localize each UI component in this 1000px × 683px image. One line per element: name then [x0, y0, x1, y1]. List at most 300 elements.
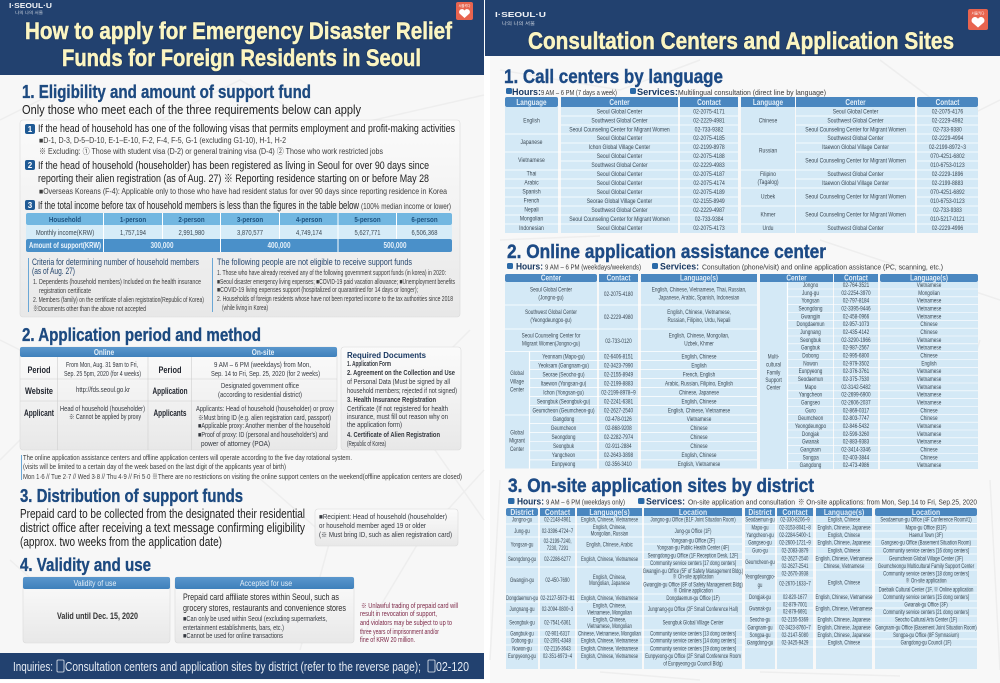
text: distribution instructions [20, 507, 306, 549]
panel: left page [0, 0, 484, 679]
rows: Seodaemun to Yeongdeungpo: Community service centers [18 dong centers] [883, 571, 969, 578]
table: household income and support amount: 5,627,771 [355, 229, 381, 237]
rows: district centers: Chinese [920, 416, 938, 422]
rows: Global Migrant Center: 02-868-9208 [605, 425, 632, 432]
rows: Seodaemun to Yeongdeungpo: Yangcheon-gu [746, 532, 774, 539]
rows: district centers: Chinese [920, 408, 938, 415]
rows: Jongno to Gwangjin: Mongolian, Russian [591, 531, 628, 538]
rows: district centers: Vietnamese [917, 392, 941, 399]
table: household income and support amount: 6,506,368 [412, 229, 438, 237]
rows: Dongdaemun to Eunpyeong: Jungnang-gu Office (2F Small Conference Hall) [648, 606, 738, 613]
rows: Dongdaemun to Eunpyeong: 02-901-6317 [545, 631, 570, 638]
rows: Global Village Center: Arabic, Russian, Filipino, English [665, 381, 733, 388]
rows: Seodaemun to Yeongdeungpo: English, Chinese [828, 532, 860, 539]
rows: main global centers: English, Chinese, Vietnamese, Thai, Russian, [652, 287, 747, 294]
column group: right languages: 02-733-9383 [933, 208, 962, 214]
rows: district centers: Vietnamese [917, 337, 941, 344]
rows: Dongdaemun to Eunpyeong: Chinese, Vietnamese, Mongolian [578, 631, 641, 638]
rows: district centers: 02-957-1073 [843, 322, 869, 328]
rows: Global Village Center: Village [510, 379, 524, 386]
rows: district centers: Chinese [920, 329, 938, 336]
rows: Seodaemun to Yeongdeungpo: Daebaik Cultural Center (1F, ※ Online application [879, 585, 973, 594]
rows: Global Village Center: Yeonnam (Mapo-gu) [542, 354, 585, 361]
rows: district centers: 02-3414-3346 [841, 447, 871, 454]
rows: Dongjak to Gangdong: English, Chinese, Vietnamese [815, 594, 873, 601]
column group: right languages: Southwest Global Center [827, 118, 884, 125]
rows: Global Migrant Center: Gangdong [553, 416, 574, 423]
label: multicultural family support center: Center [767, 385, 781, 392]
rows: district centers: Seodaemun [798, 376, 823, 383]
callout: recipient [315, 509, 458, 546]
rows: Dongdaemun to Eunpyeong [506, 595, 741, 668]
panel: right page [485, 0, 1000, 669]
column group: left languages: Southwest Global Center [591, 118, 648, 125]
panel: validity of use: Valid until Dec. 15, 2020 [57, 611, 138, 621]
heading: call centers: 1. Call centers by language [504, 66, 723, 88]
rows: district centers: Songpa [803, 455, 819, 462]
column group: right languages: Chinese [759, 118, 777, 125]
note: five day rotational system [21, 453, 462, 481]
rows: district centers: Eunpyeong [799, 369, 822, 375]
panel: accepted for use: ■Cannot be used for online transactions [183, 632, 283, 640]
note: ineligible people: 2. Households of foreign residents whose have not been reported income to the tax authorities since 2018 [217, 294, 453, 303]
table: household income and support amount: 300,000 [150, 241, 174, 250]
note: ineligible people: 1. Those who have already received any of the following government support funds (in korea) in 2020: [217, 268, 446, 277]
panel: accepted for use: Accepted for use [240, 578, 292, 588]
column group: left languages: Seoul Global Center [597, 226, 642, 232]
header banner: right [485, 0, 1000, 56]
rows: Seodaemun to Yeongdeungpo: 02-2284-5400~1 [779, 532, 811, 539]
rows: Seodaemun to Yeongdeungpo: Mapo-gu [752, 525, 768, 532]
rows: district centers: Gangbuk [801, 345, 820, 352]
logo: I Seoul U right: 나의 나의 서울 [502, 20, 535, 27]
column group: right languages: 02-2229-1896 [932, 172, 963, 178]
rows: Seodaemun to Yeongdeungpo: Guro-gu [752, 548, 768, 555]
column group: right languages: 010-6753-0123 [930, 163, 965, 169]
rows: district centers: 02-3290-1966 [841, 337, 871, 344]
row: website: (according to residential district) [218, 391, 302, 399]
rows: Jongno to Gwangjin: Jongno-gu [512, 517, 532, 524]
panel: required documents: 4. Certificate of Alien Registration [347, 431, 440, 439]
rows: district centers: 02-764-3521 [843, 282, 869, 289]
rows: Global Village Center: Chinese, Japanese [679, 390, 719, 397]
column group: right languages: 02-2075-4176 [932, 109, 963, 116]
rows: Dongdaemun to Eunpyeong: English, Chinese, [593, 617, 627, 624]
rows: main global centers: 02-2229-4980 [604, 314, 633, 321]
row: applicant [24, 405, 334, 448]
logo: I Seoul U: I·SEOUL·U [9, 3, 52, 10]
panel: required documents: 2. Agreement on the Collection and Use [347, 369, 455, 377]
rows: district centers: 02-797-8184 [843, 298, 869, 305]
rows: district centers: Vietnamese [917, 431, 941, 438]
table: household income and support amount: 400,000 [267, 241, 291, 250]
table: call centers by language: Contact [936, 98, 960, 107]
row: applicant: power of attorney (POA) [201, 440, 270, 448]
column group: left languages: Seoul Global Center [597, 181, 642, 187]
rows: district centers: Gangnam [800, 447, 821, 454]
requirement 3: income: (100% median income or lower) [361, 202, 451, 211]
rows: Global Village Center: English, Chinese [681, 399, 717, 406]
column group: left languages: 02-733-9384 [695, 217, 724, 223]
column group: left languages: Mongolian [520, 216, 543, 223]
rows: Dongdaemun to Eunpyeong: English, Chinese, Vietnamese [581, 595, 638, 602]
rows: Global Village Center: Ichon (Yongsan-gu) [543, 390, 584, 397]
note: household member criteria: 2. Members (family) on the certificate of alien registration(Republic of Korea) [33, 295, 204, 304]
rows: main global centers: 02-2075-4180 [604, 291, 633, 298]
column group: left languages: Indonesian [519, 226, 544, 232]
row: applicant: ※ Cannot be applied by proxy [69, 413, 141, 421]
table: call centers by language [505, 97, 978, 233]
column group: right languages: Seoul Counseling Center for Migrant Women [805, 194, 906, 201]
rows: Dongjak to Gangdong: 02-879-6691 [783, 609, 807, 616]
column group: left languages: Seoul Counseling Center for Migrant Women [569, 127, 670, 134]
rows: Dongdaemun to Eunpyeong: Community service centers [14 dong centers] [650, 638, 736, 645]
rows: Global Migrant Center: Seongdong [552, 434, 575, 441]
row: website: http://fds.seoul.go.kr [76, 386, 131, 394]
rows: Global Migrant Center: Chinese [690, 425, 708, 432]
rows: Seodaemun to Yeongdeungpo: Mapo-gu Office (B1F) [905, 525, 947, 532]
column group: right languages: 02-2199-8883 [932, 181, 963, 187]
column group: left languages: Seoul Global Center [597, 136, 642, 142]
panel: accepted for use: ■Can only be used within Seoul (excluding supermarkets, [183, 615, 327, 623]
rows: district centers: Vietnamese [917, 298, 941, 305]
column group: left languages: Spanish [522, 189, 541, 196]
rows: Dongdaemun to Eunpyeong: Dongdaemun-gu Office (1F) [666, 595, 720, 602]
requirement 1: visa: If the head of household has one of the following visas that permits employment and profit-making activities [38, 123, 455, 135]
rows: main global centers [522, 287, 747, 348]
table: online and on-site application: Online [94, 347, 114, 357]
rows: Dongdaemun to Eunpyeong: 02-2091-4348 [544, 638, 571, 645]
info: call center hours and services: Multilingual consultation (direct line by language) [678, 88, 826, 97]
rows: Jongno to Gwangjin: Jung-gu Office (1F) [675, 528, 712, 535]
rows: Global Migrant Center: Migrant [509, 438, 525, 445]
column group: left languages: 02-2229-4987 [693, 208, 725, 214]
rows: Jongno to Gwangjin: English, Chinese, [593, 524, 627, 531]
table: household income and support amount: 2,991,980 [179, 229, 205, 237]
rows: Global Village Center: Geumcheon (Geumcheon-gu) [532, 408, 595, 415]
column group: left languages: 02-2199-8978 [693, 145, 725, 151]
note: ineligible people [212, 256, 455, 312]
info: online assistance hours and services: Services: [660, 262, 699, 272]
rows: district centers [795, 282, 941, 469]
rows: district centers: Vietnamese [917, 345, 941, 352]
rows: main global centers: (Jongno-gu) [538, 295, 564, 302]
rows: Global Village Center: 02-2627-2540 [604, 408, 633, 415]
table: household income and support amount: 1,757,194 [120, 229, 146, 237]
rows: district centers: 02-2254-3970 [841, 290, 871, 297]
row: applicant: Applicant [24, 407, 54, 418]
callout: recipient: (※ Must bring ID, such as alien registration card) [319, 531, 452, 539]
table: household income and support amount: Monthly income(KRW) [36, 229, 94, 237]
title: Funds for Foreign Residents in Seoul [62, 45, 421, 72]
column group: left languages: Arabic [524, 180, 539, 187]
rows: Global Village Center: English, Chinese [681, 354, 717, 361]
rows: Seodaemun to Yeongdeungpo: 02-2627-2541 [782, 563, 808, 570]
rows: district centers: Nowon [803, 361, 818, 368]
rows: Jongno to Gwangjin: Gwangjin-gu Office (8F of Safety Management Bldg) [643, 582, 743, 589]
rows: Seodaemun to Yeongdeungpo: gu [758, 582, 762, 589]
rows: Global Village Center: French, English [683, 372, 715, 379]
row: period: Period [28, 364, 51, 375]
rows: district centers: Vietnamese [917, 282, 941, 289]
column group: left languages: 02-2075-4185 [693, 136, 725, 142]
rows: district centers: Seongdong [799, 306, 822, 313]
rows: Dongdaemun to Eunpyeong: Jungnang-gu [509, 606, 535, 613]
rows: Global Village Center: 02-6406-8151 [604, 354, 633, 361]
heading: on-site sites: 3. On-site application sites by district [508, 475, 814, 497]
row: applicant: ■Proof of proxy: ID (personal and householder's) and [198, 431, 328, 439]
rows: Seodaemun to Yeongdeungpo: Seodaemun-gu Office (4F Conference Room#1) [880, 517, 972, 524]
info: online assistance hours and services: Consultation (phone/visit) and online application assistance (PC, scanning, etc.) [702, 262, 943, 272]
column group: left languages: 02-2075-4174 [693, 181, 726, 187]
rows: Dongjak to Gangdong: 02-820-1677 [783, 594, 807, 601]
rows: district centers: 02-2606-2037 [841, 400, 871, 407]
rows: Jongno to Gwangjin: 02-450-7690 [545, 577, 570, 584]
info: online assistance hours and services [507, 262, 943, 272]
rows: Dongdaemun to Eunpyeong: Dobong-gu [511, 638, 533, 645]
rows: Jongno to Gwangjin: 02-3396-4724~7 [542, 528, 573, 535]
rows: Seodaemun to Yeongdeungpo: 02-3153-8041~8 [779, 525, 811, 532]
rows: Dongdaemun to Eunpyeong: Nowon-gu [512, 646, 532, 653]
table: household income and support amount: Household [49, 217, 81, 224]
column group: left languages: 02-2075-4173 [693, 226, 725, 232]
rows: Jongno to Gwangjin: Jongno-gu Office (B1F Joint Situation Room) [650, 517, 736, 524]
rows: Global Migrant Center: Yangcheon [552, 452, 575, 459]
logo: I Seoul U: 나의 나의 서울 [15, 9, 43, 15]
note: ineligible people: (while living in Korea) [222, 303, 268, 312]
rows: Jongno to Gwangjin: Mongolian, Japanese [589, 580, 630, 587]
rows: Global Migrant Center: Center [510, 446, 524, 453]
rows: district centers: 02-987-2567 [843, 345, 869, 352]
rows: Jongno to Gwangjin: Yongsan-gu Office (2F) [671, 538, 715, 545]
callout: recipient: ■Recipient: Head of household (householder) [319, 513, 447, 521]
requirement 3: income: If the total income before tax of household members is less than the figures in the table below [38, 200, 359, 212]
rows: Global Migrant Center: 02-911-2884 [605, 443, 632, 450]
rows: Global Migrant Center: 02-2282-7974 [604, 434, 633, 441]
row: website: Designated government office [221, 382, 299, 390]
panel: required documents: of Personal Data (Must be signed by all [347, 378, 450, 386]
rows: Dongjak to Gangdong: Seocho Cultural Arts Center (1F) [895, 617, 957, 624]
table: online assistance centers, left: Center [541, 274, 561, 283]
footer: inquiries: Inquiries: [13, 659, 53, 674]
panel: required documents [341, 347, 461, 450]
warning: unlawful trading: ※ Unlawful trading of prepaid card will [361, 602, 458, 610]
rows: district centers: Mapo [805, 384, 816, 391]
column group: left languages: 02-2075-4187 [693, 172, 725, 178]
requirement 1: visa: ■D-1, D-3, D-5–D-10, E-1–E-10, F-2, F-4, F-5, G-1 (excluding G1-10), H-1, H-2 [39, 136, 286, 145]
rows: district centers: Vietnamese [917, 369, 941, 375]
column group: right languages: Seoul Global Center [833, 109, 878, 116]
table: household income and support amount: 2-person [178, 217, 205, 224]
info: on-site hours and services [508, 496, 977, 506]
rows: Global Village Center: Center [510, 387, 524, 394]
column group: left languages: Seoul Counseling Center for Migrant Women [569, 217, 670, 223]
row: applicant: Applicants [154, 407, 186, 418]
table: online assistance centers, left: Contact [607, 274, 631, 283]
column group: right languages: Seoul Counseling Center for Migrant Women [805, 212, 906, 219]
rows: main global centers: 02-733-0120 [605, 338, 632, 345]
table: on-site sites, left half: Location [679, 507, 708, 517]
rows: Dongjak to Gangdong: English, Chinese, Japanese [817, 632, 871, 639]
label: multicultural family support center: cultural [766, 362, 781, 369]
rows: Dongdaemun to Eunpyeong: English, Chinese, Vietnamese [581, 646, 638, 653]
info: on-site hours and services: ※ On-site applications: from Mon, Sep.14 to Fri, Sep.25, 2020 [798, 498, 977, 506]
info: on-site hours and services: 9 AM – 6 PM (weekdays only) [546, 498, 625, 506]
rows: Global Migrant Center: Chinese [690, 434, 708, 441]
rows: district centers: Vietnamese [917, 376, 941, 383]
heading: section 4 validity: 4. Validity and use [20, 555, 151, 575]
rows: Global Village Center: 02-2199-8883 [604, 381, 633, 388]
table: household income and support amount: 4,749,174 [296, 229, 322, 237]
rows: district centers: 02-458-0966 [843, 314, 869, 321]
info: on-site hours and services: Services: [646, 496, 685, 506]
rows: district centers: Dongjak [802, 431, 819, 438]
header banner: left [0, 0, 484, 75]
column group: left languages: 02-2229-4983 [693, 163, 725, 169]
rows: Seodaemun to Yeongdeungpo: Geumcheon Global Village Center (3F) [889, 556, 963, 563]
panel: required documents: insurance, must fill out reason why on [347, 413, 448, 421]
rows: Seodaemun to Yeongdeungpo: English, Chinese [828, 548, 860, 555]
table: multicultural family support centers: Language(s) [910, 274, 949, 283]
column group: left languages: Vietnamese [518, 158, 545, 164]
title [25, 18, 453, 72]
column group: left languages: 02-2229-4981 [693, 118, 725, 125]
icon: Seoul heart badge right: 서울키다 [972, 10, 985, 16]
rows: district centers: Chinese [920, 455, 938, 462]
text: distribution instructions: Prepaid card to be collected from the designated their residential [20, 507, 305, 521]
rows: Dongdaemun to Eunpyeong: Community service centers [19 dong centers] [650, 646, 736, 653]
rows: Dongjak to Gangdong [747, 594, 977, 647]
table: on-site sites, right half [745, 507, 977, 669]
rows: district centers: Yongsan [801, 298, 820, 305]
row: period [28, 361, 320, 378]
footer: inquiries [0, 653, 484, 679]
panel: eligibility requirements [20, 120, 460, 317]
warning: unlawful trading: and violators may be subject to up to [360, 620, 452, 627]
rows: Dongjak to Gangdong: 02-3423-8760~7 [779, 625, 811, 632]
column group: left languages: Japanese [521, 140, 542, 146]
logo: I Seoul U right: I·SEOUL·U [495, 12, 546, 19]
rows: Global Village Center: Yeoksam (Gangnam-gu) [538, 363, 589, 370]
icon: Seoul heart badge right [968, 9, 988, 30]
rows: Dongjak to Gangdong: Seocho-gu [750, 617, 770, 624]
table: online and on-site application [20, 347, 337, 450]
rows: Global Migrant Center: 02-2643-3898 [604, 452, 633, 459]
rows: district centers: Vietnamese [917, 314, 941, 321]
note: household member criteria: Criteria for determining number of household members [32, 256, 199, 267]
rows: district centers: 02-375-7530 [843, 376, 869, 383]
rows: Dongdaemun to Eunpyeong: Community service centers [13 dong centers] [650, 631, 736, 638]
table: on-site sites, left half [506, 507, 743, 669]
logo: I Seoul U [9, 3, 52, 15]
column group: right languages: 02-733-9380 [933, 127, 962, 134]
rows: district centers: 02-869-0317 [843, 408, 869, 415]
rows: Global Village Center: 02-2155-8949 [604, 372, 633, 379]
note: ineligible people: ■COVID-19 living expenses support (hospitalized or quarantined for 14 days or longer); [217, 285, 418, 294]
rows: main global centers: Seoul Global Center [530, 287, 572, 294]
rows: Jongno to Gwangjin: Yongsan-gu [511, 542, 533, 549]
table: call centers by language: Center [609, 98, 630, 107]
column group: right languages: 070-4251-6892 [930, 190, 965, 196]
column group: right languages: Uzbek [761, 194, 775, 201]
rows: Global Migrant Center: Chinese [690, 443, 708, 450]
table: on-site sites, left half: Language(s) [589, 507, 630, 517]
table: household income and support amount: 4-person [296, 217, 322, 224]
row: period: Sep. 14 to Fri, Sep. 25, 2020 (for 2 weeks) [211, 370, 320, 378]
rows: Jongno to Gwangjin: Seongdong-gu [508, 556, 536, 563]
rows: Dongdaemun to Eunpyeong: of Eunpyeong-gu Council Bldg) [663, 661, 723, 668]
label: multicultural family support center: Multi- [768, 354, 779, 361]
rows: Global Village Center: 02-2241-6381 [604, 399, 633, 406]
footer: inquiries: Consultation centers and application sites by district (refer to the reverse page); [65, 659, 421, 674]
requirement 2: residence: If the head of household (householder) has been registered as living in Seoul for over 90 days since [38, 160, 429, 172]
rows: Seodaemun to Yeongdeungpo: 02-2083-3879 [782, 548, 808, 555]
column group: left languages: French [524, 198, 539, 205]
rows: district centers: 02-803-7747 [843, 416, 869, 422]
table: on-site sites, right half: District [748, 507, 772, 517]
rows: Seodaemun to Yeongdeungpo: 02-330-8206~9 [780, 517, 810, 524]
rows: Dongdaemun to Eunpyeong: Dongdaemun-gu [506, 595, 538, 602]
requirement 2: residence [25, 160, 448, 196]
requirement 1: visa [25, 123, 455, 156]
rows: Seodaemun to Yeongdeungpo: English, Chinese, Japanese [817, 540, 871, 547]
rows: Global Migrant Center: 02-356-3410 [605, 461, 632, 468]
rows: Jongno to Gwangjin: Gwangjin-gu Office (5F of Safety Management Bldg.) [643, 568, 743, 575]
rows: district centers: 02-2699-6900 [841, 392, 871, 399]
heading: online assistance: 2. Online application assistance center [507, 241, 826, 263]
rows: Dongdaemun to Eunpyeong: 02-2116-3643 [544, 646, 571, 653]
panel: required documents: 3. Health Insurance Registration [347, 396, 436, 404]
rows: Seodaemun to Yeongdeungpo: Geumcheon-gu [745, 559, 775, 566]
panel: accepted for use [175, 577, 354, 643]
column group: left languages: 02-2075-4171 [693, 109, 725, 116]
table: on-site sites, right half: Location [912, 507, 941, 517]
table: call centers by language: Contact [697, 98, 722, 107]
panel: required documents: Required Documents [347, 350, 426, 360]
requirement 1: visa: 1 [28, 125, 33, 134]
note: household member criteria [28, 256, 204, 313]
warning: unlawful trading: result in revocation of support, [360, 611, 437, 618]
rows: district centers: Vietnamese [917, 306, 941, 313]
column group: right languages: Russian [759, 148, 777, 155]
rows: district centers: Chinese [920, 353, 938, 360]
note: household member criteria: ※Documents other than the above not accepted [33, 304, 146, 313]
rows: district centers: Geumcheon [798, 416, 823, 422]
note: household member criteria: 1. Dependents (household members) Included on the health insurance [33, 277, 201, 286]
rows: Seodaemun to Yeongdeungpo: Yeongdeungpo- [745, 574, 775, 581]
rows: Global Village Center: English [691, 363, 707, 370]
column group: right languages: 070-4251-6802 [930, 154, 965, 160]
rows: Dongdaemun to Eunpyeong: Vietnamese, Mongolian [587, 623, 632, 630]
rows: Global Migrant Center: Geumcheon [551, 425, 576, 432]
rows: Dongdaemun to Eunpyeong: English, Chinese, Vietnamese [581, 653, 638, 660]
requirement 3: income: 3 [28, 201, 33, 210]
text: distribution instructions: (approx. two weeks from the application date) [20, 535, 222, 549]
column group: right languages: Filipino [760, 172, 776, 178]
rows: main global centers: Russian, Filipino, Urdu, Nepali [668, 317, 730, 324]
rows: district centers: 02-883-9383 [843, 439, 869, 446]
panel: accepted for use: entertainment establishments, bars, etc.) [183, 624, 284, 632]
rows: Seodaemun to Yeongdeungpo: 02-2670-1633~7 [779, 581, 811, 588]
rows: district centers: Dongdaemun [796, 322, 825, 328]
rows: district centers: Vietnamese [917, 463, 941, 469]
table: household income and support amount: 3-person [237, 217, 263, 224]
column group: right languages: 02-2229-4982 [932, 118, 963, 125]
rows: district centers: 02-3142-5482 [841, 384, 871, 391]
rows: Global Village Center: English, Chinese, Vietnamese [668, 408, 730, 415]
info: on-site hours and services: On-site application and consultation [688, 498, 795, 506]
rows: Seodaemun to Yeongdeungpo: Haenul Town (3F) [909, 532, 943, 539]
